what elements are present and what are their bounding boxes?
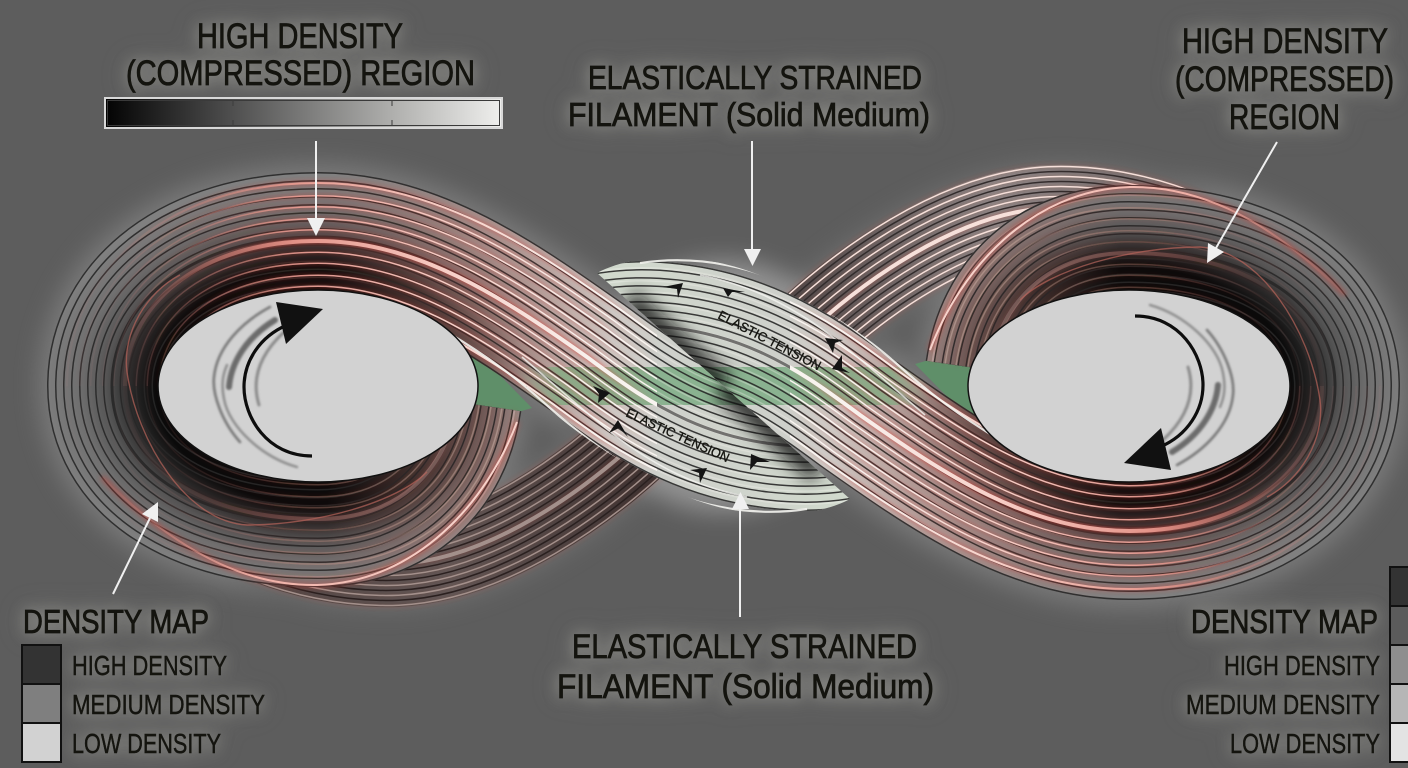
heading: elastically strained bottom xyxy=(557,628,934,706)
filament band wrapping left core xyxy=(39,152,967,622)
legend: density map left: MEDIUM DENSITY xyxy=(72,689,265,720)
rear filament tail upper right xyxy=(700,100,1300,420)
elastic tension label lower: ELASTIC TENSION xyxy=(624,405,732,465)
legend: density map right: DENSITY MAP xyxy=(1191,603,1378,640)
heading: high density top left: HIGH DENSITY xyxy=(197,17,403,56)
left core ellipse xyxy=(158,290,478,482)
arrow: bottom center pointer xyxy=(732,492,749,617)
heading: high density top right: REGION xyxy=(1229,98,1340,137)
green connector triangle right xyxy=(915,346,978,425)
heading: high density top left: (COMPRESSED) REGION xyxy=(126,54,475,93)
rotation arrow right core xyxy=(1124,305,1233,470)
glow halo behind figure-eight xyxy=(112,208,1335,564)
heading: high density top left xyxy=(126,17,475,93)
heading: elastically strained top: ELASTICALLY STRAINED xyxy=(588,59,922,96)
arrow: bottom left pointer xyxy=(113,502,158,594)
filament band wrapping right core xyxy=(480,150,1408,620)
legend: density map left: DENSITY MAP xyxy=(23,603,209,640)
heading: elastically strained bottom: FILAMENT (Solid Medium) xyxy=(557,668,934,706)
heading: elastically strained top xyxy=(568,59,930,133)
right core ellipse xyxy=(968,290,1290,482)
rotation arrow left core xyxy=(214,302,323,467)
heading: high density top right xyxy=(1175,22,1394,137)
heading: elastically strained top: FILAMENT (Solid Medium) xyxy=(568,96,930,133)
elastic tension label upper: ELASTIC TENSION xyxy=(716,307,824,373)
legend: density map right xyxy=(1186,567,1408,762)
legend: density map left: HIGH DENSITY xyxy=(72,650,227,681)
arrow: top center pointer xyxy=(744,141,761,266)
tension arrows xyxy=(593,283,850,483)
legend: density map left: LOW DENSITY xyxy=(72,728,221,759)
arrow: top left pointer xyxy=(307,141,325,236)
heading: elastically strained bottom: ELASTICALLY STRAINED xyxy=(572,628,917,666)
arrow: top right pointer xyxy=(1207,142,1277,263)
legend: density map left xyxy=(22,603,265,762)
rear filament tail lower left xyxy=(147,352,747,672)
green connector triangle left xyxy=(469,347,532,426)
density gradient bar xyxy=(105,98,502,128)
